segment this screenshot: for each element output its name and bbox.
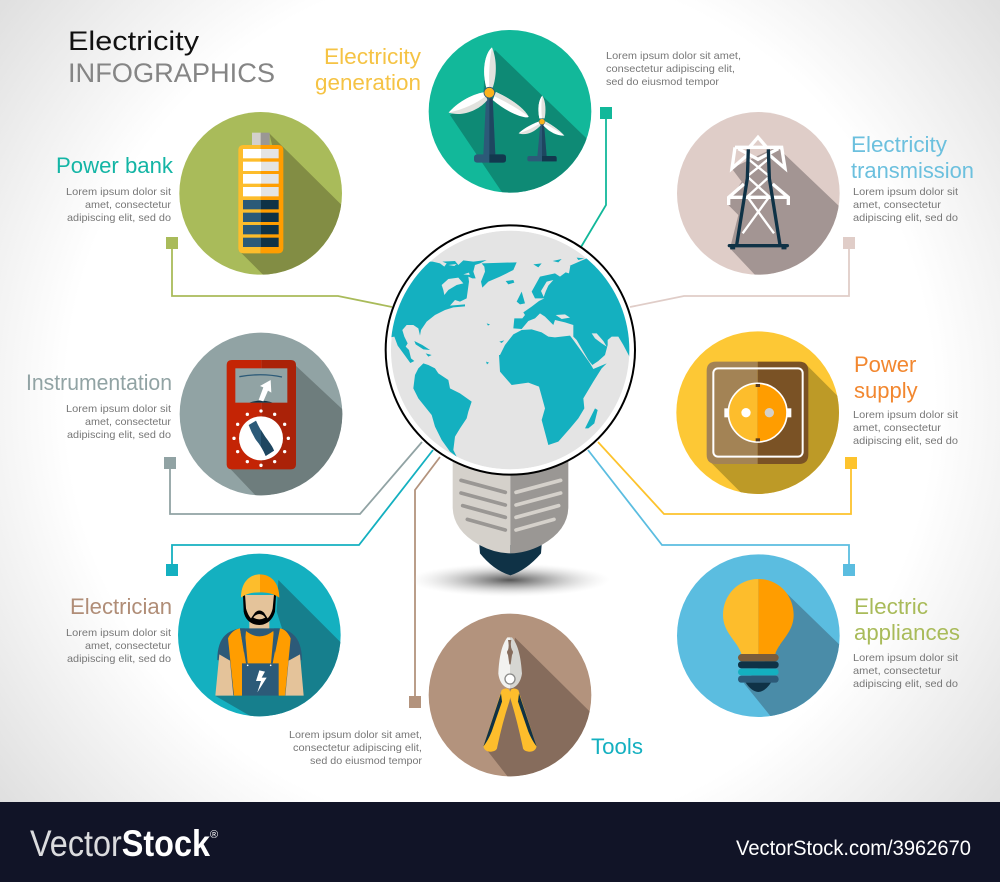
text: generation description: Lorem ipsum dolor sit amet,	[606, 50, 741, 62]
heading: power supply	[854, 352, 918, 403]
heading: electrician: Electrician	[70, 594, 172, 619]
title: INFOGRAPHICS	[68, 58, 275, 88]
panel: tools	[289, 614, 643, 782]
south america	[413, 363, 472, 457]
heading: electricity generation: Electricity	[324, 44, 421, 69]
heading: electric appliances: appliances	[854, 620, 960, 645]
heading: electricity generation: generation	[315, 70, 421, 95]
title: Electricity	[68, 26, 200, 56]
inland seas	[442, 264, 607, 347]
heading: electricity transmission	[851, 132, 974, 183]
eurasia	[513, 258, 630, 365]
panel: instrumentation	[26, 333, 347, 498]
panel: power bank	[56, 112, 347, 277]
text: power supply description: Lorem ipsum dolor sit	[853, 409, 958, 421]
text: tools description	[289, 729, 423, 767]
text: electrician description: amet, consectetur	[85, 640, 172, 652]
panel: electricity transmission	[677, 112, 974, 277]
bulb base	[479, 545, 542, 575]
text: appliances description: amet, consectetur	[853, 665, 942, 677]
text: tools description: consectetur adipiscing elit,	[293, 742, 422, 754]
bulb shadow	[410, 563, 610, 597]
connector: electricity generation	[581, 107, 612, 247]
text: transmission description: Lorem ipsum dolor sit	[853, 186, 958, 198]
icon: electrician worker	[178, 554, 347, 722]
text: tools description: sed do eiusmod tempor	[310, 755, 423, 767]
globe	[391, 230, 630, 470]
africa	[499, 329, 607, 445]
greenland	[481, 262, 517, 288]
text: transmission description: amet, consectetur	[853, 199, 942, 211]
text: power bank description	[66, 186, 172, 224]
text: generation description: consectetur adipiscing elit,	[606, 63, 735, 75]
text: transmission description	[853, 186, 958, 224]
panel: power supply	[676, 331, 958, 498]
text: power supply description: adipiscing elit, sed do	[853, 435, 958, 447]
panel: electricity generation	[315, 30, 741, 197]
text: transmission description: adipiscing elit, sed do	[853, 212, 958, 224]
heading: power bank: Power bank	[56, 153, 174, 178]
text: appliances description: Lorem ipsum dolor sit	[853, 652, 958, 664]
text: instrumentation description: adipiscing elit, sed do	[67, 429, 171, 441]
text: appliances description: adipiscing elit, sed do	[853, 678, 958, 690]
text: electrician description: adipiscing elit, sed do	[67, 653, 171, 665]
panel: electrician	[66, 554, 347, 722]
connector: instrumentation	[164, 442, 422, 514]
north america	[385, 260, 487, 363]
heading: electric appliances	[854, 594, 960, 645]
globe ring	[386, 225, 635, 475]
registered mark: ®	[210, 829, 218, 841]
british isles	[517, 292, 525, 304]
text: tools description: Lorem ipsum dolor sit amet,	[289, 729, 422, 741]
icon: light bulb	[677, 554, 847, 722]
footer url: VectorStock.com/3962670	[736, 837, 971, 860]
heading: instrumentation: Instrumentation	[26, 370, 172, 395]
iceland	[506, 280, 514, 284]
text: power bank description: amet, consectetur	[85, 199, 172, 211]
text: power supply description: amet, consectetur	[853, 422, 942, 434]
caribbean islands	[414, 341, 432, 357]
text: generation description: sed do eiusmod tempor	[606, 76, 720, 88]
heading: electric appliances: Electric	[854, 594, 928, 619]
text: instrumentation description: amet, consectetur	[85, 416, 172, 428]
text: power bank description: adipiscing elit, sed do	[67, 212, 171, 224]
text: power supply description	[853, 409, 958, 447]
icon: pylon	[677, 112, 847, 277]
connector: power bank	[166, 237, 392, 307]
text: power bank description: Lorem ipsum dolor sit	[66, 186, 171, 198]
heading: electricity transmission: transmission	[851, 158, 974, 183]
title	[68, 26, 275, 88]
madagascar	[585, 408, 598, 428]
text: electrician description	[66, 627, 172, 665]
text: generation description	[606, 50, 741, 88]
bulb socket	[453, 462, 568, 553]
atlantic islands	[486, 323, 504, 364]
icon: wall socket	[676, 331, 847, 498]
icon: multimeter	[180, 333, 347, 498]
heading: electricity transmission: Electricity	[851, 132, 947, 157]
panel: electric appliances	[677, 554, 960, 722]
icon: pliers	[429, 614, 597, 782]
connector: electrician	[166, 450, 433, 576]
footer logo: VectorStock	[30, 823, 210, 864]
text: instrumentation description	[66, 403, 172, 441]
heading: power supply: supply	[854, 378, 918, 403]
text: appliances description	[853, 652, 958, 690]
text: instrumentation description: Lorem ipsum dolor sit	[66, 403, 171, 415]
heading: power supply: Power	[854, 352, 916, 377]
footer banner	[0, 802, 1000, 882]
heading: tools: Tools	[591, 734, 643, 759]
heading: electricity generation	[315, 44, 421, 95]
map: world continents	[391, 258, 630, 456]
connector: power supply	[598, 442, 857, 514]
central light bulb with globe	[385, 225, 652, 597]
connector: electric appliances	[588, 450, 855, 576]
connector: electricity transmission	[630, 237, 855, 307]
connector: tools	[409, 457, 440, 708]
icon: battery	[179, 112, 347, 277]
icon: wind turbines	[429, 30, 593, 197]
arctic islands	[533, 258, 584, 267]
text: electrician description: Lorem ipsum dolor sit	[66, 627, 171, 639]
